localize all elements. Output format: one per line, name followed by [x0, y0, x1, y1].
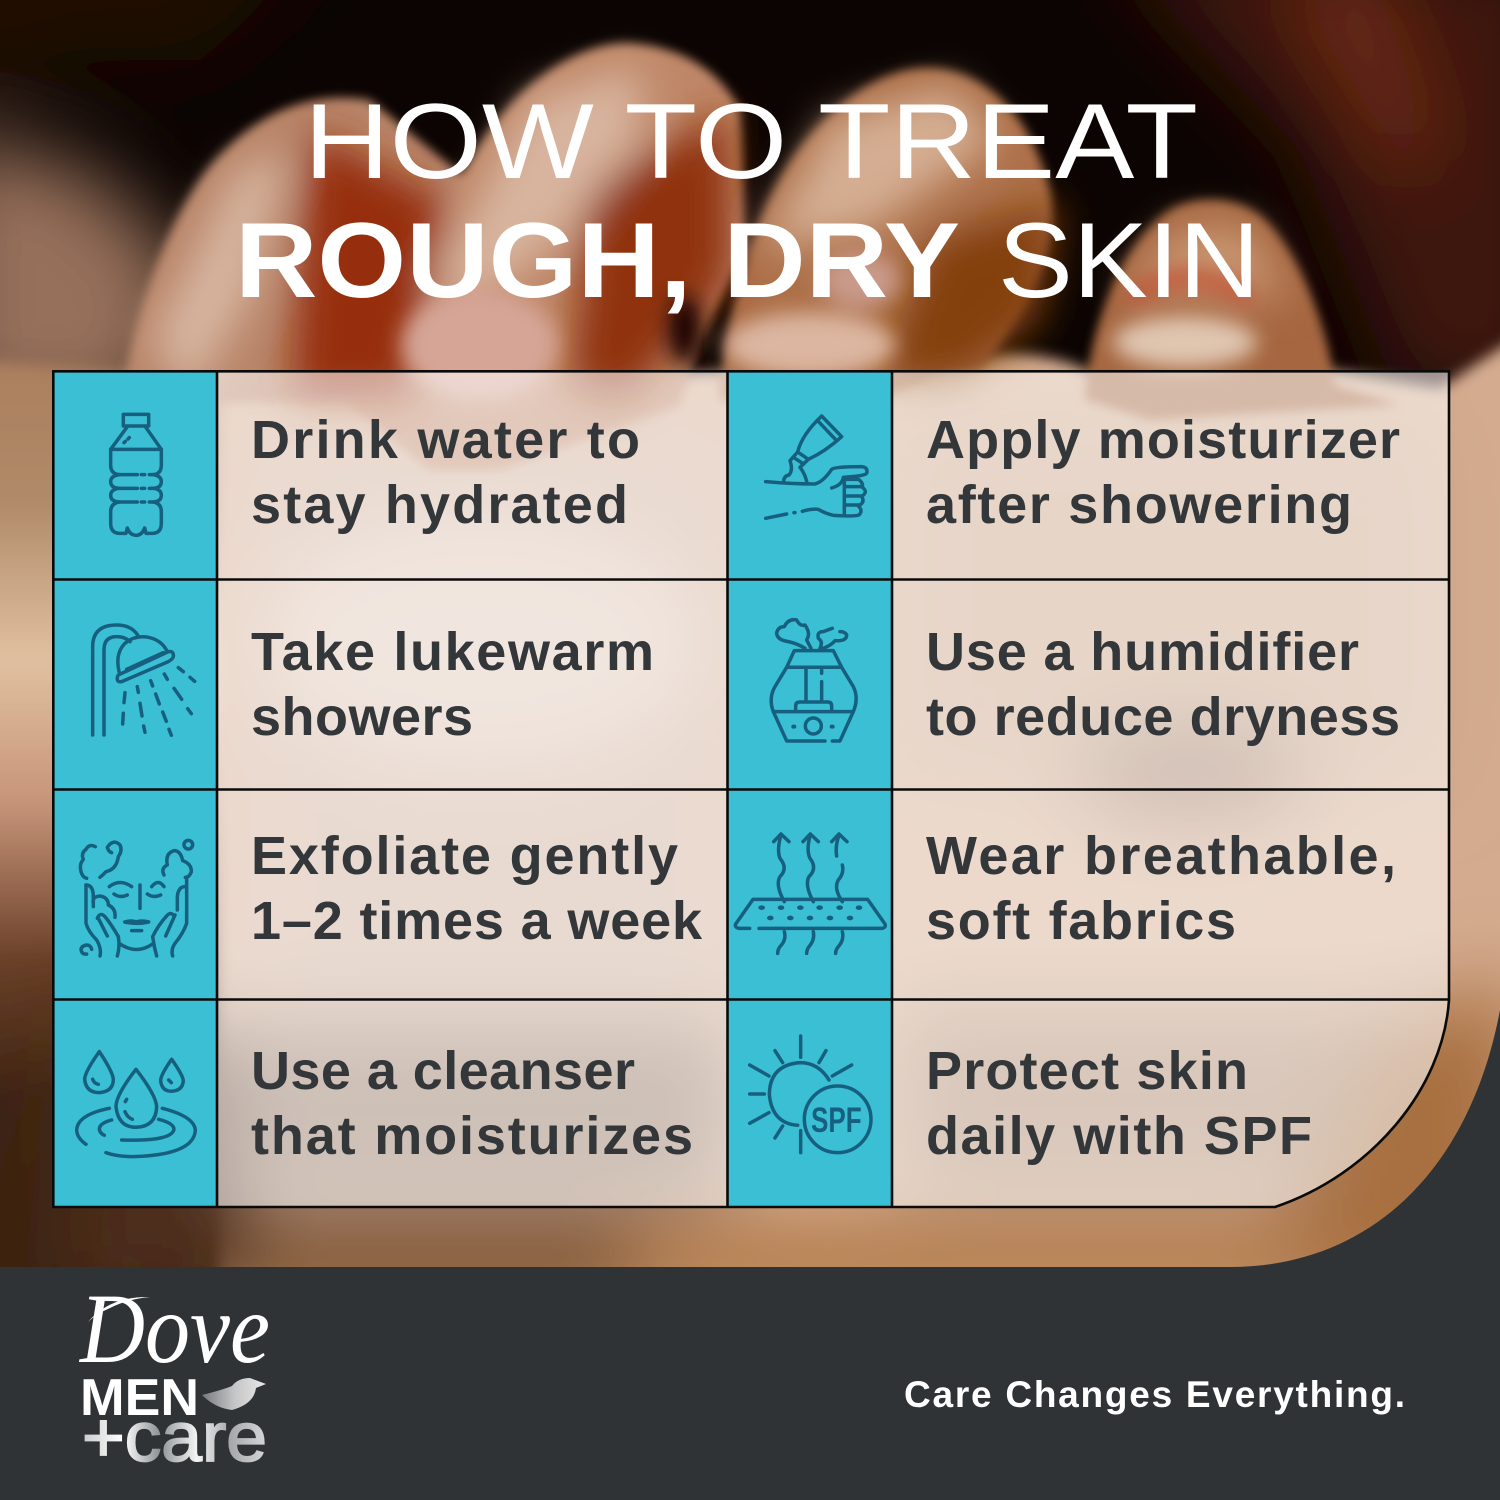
title: HOW TO TREAT	[304, 81, 1198, 201]
text: fabrics	[926, 826, 1396, 951]
text: moisturizer: after showering	[926, 475, 1352, 535]
icon: tube and hand	[766, 416, 867, 518]
panel: fabrics	[735, 826, 1396, 953]
palm	[0, 300, 1500, 1300]
icon: dove bird	[202, 1378, 266, 1410]
icon: sun with SPF badge	[750, 1036, 871, 1153]
title	[235, 81, 1260, 320]
icon column: right cyan cells	[727, 370, 892, 1208]
text: fabrics: soft fabrics	[926, 891, 1236, 951]
icon: sun with SPF badge: SPF	[811, 1101, 862, 1140]
text: drink water: Drink water to	[251, 410, 640, 470]
icon: water drops and ripple	[77, 1052, 195, 1157]
logo: Dove Men+Care: MEN	[80, 1369, 199, 1427]
logo: Dove Men+Care	[78, 1273, 270, 1476]
panel: lukewarm showers	[93, 622, 654, 747]
icon column: left cyan cells	[52, 370, 217, 1208]
text: humidifier: to reduce dryness	[926, 687, 1400, 747]
text: lukewarm showers: Take lukewarm	[251, 622, 654, 682]
text: lukewarm showers	[251, 622, 654, 747]
translucent table panel	[52, 370, 1450, 1208]
panel: cleanser	[77, 1041, 693, 1166]
text: exfoliate: Exfoliate gently	[251, 826, 678, 886]
text: fabrics: Wear breathable,	[926, 826, 1396, 886]
text: cleanser: that moisturizes	[251, 1106, 693, 1166]
icon: breathable fabric	[735, 834, 885, 953]
text: moisturizer	[926, 410, 1400, 535]
text: moisturizer: Apply moisturizer	[926, 410, 1400, 470]
text: exfoliate: 1–2 times a week	[251, 891, 703, 951]
text: humidifier	[926, 622, 1400, 747]
title: SKIN	[998, 200, 1260, 320]
logo: Dove Men+Care: Dove	[78, 1273, 270, 1384]
text: drink water	[251, 410, 640, 535]
text: sunscreen: daily with SPF	[926, 1106, 1312, 1166]
panel: humidifier	[771, 620, 1400, 747]
icon: humidifier	[771, 620, 856, 741]
icon: shower head	[93, 625, 195, 735]
dark footer band with curved corner	[0, 1010, 1500, 1500]
text: sunscreen: Protect skin	[926, 1041, 1248, 1101]
text: cleanser: Use a cleanser	[251, 1041, 635, 1101]
title: ROUGH, DRY	[235, 200, 960, 320]
text: lukewarm showers: showers	[251, 687, 473, 747]
panel: exfoliate	[80, 826, 703, 956]
icon: water bottle	[111, 414, 161, 535]
fingers	[120, 43, 1400, 470]
panel: sunscreen	[750, 1036, 1312, 1166]
panel: drink water	[111, 410, 640, 535]
icon: face washing	[80, 840, 193, 956]
panel: moisturizer	[766, 410, 1400, 535]
text: humidifier: Use a humidifier	[926, 622, 1359, 682]
text: exfoliate	[251, 826, 703, 951]
text: cleanser	[251, 1041, 693, 1166]
logo: Dove Men+Care: +care	[82, 1398, 267, 1476]
tagline: Care Changes Everything.	[904, 1374, 1405, 1415]
text: drink water: stay hydrated	[251, 475, 628, 535]
text: sunscreen	[926, 1041, 1312, 1166]
